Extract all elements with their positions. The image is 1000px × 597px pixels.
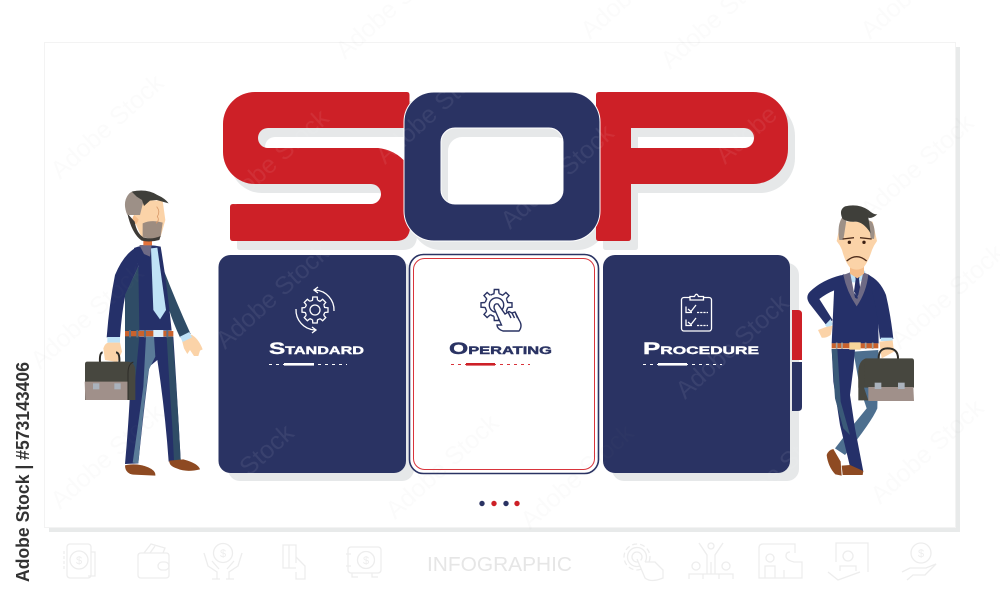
icon: rotating gear	[296, 287, 334, 333]
near arm	[107, 248, 138, 337]
watermarks over coloured shapes: Adobe Stock	[710, 53, 835, 169]
hair	[125, 191, 143, 215]
side tabs	[792, 310, 802, 411]
watermarks on white: Adobe Stock	[865, 393, 990, 509]
icon: mobile money: $	[76, 555, 82, 567]
watermarks over coloured shapes: Adobe Stock	[670, 288, 795, 404]
divider	[451, 363, 530, 366]
bent arm	[807, 275, 842, 326]
torso	[125, 245, 172, 331]
watermarks on white: Adobe Stock	[45, 398, 170, 514]
watermarks on white: Adobe Stock	[855, 108, 980, 224]
character: bearded businessman with briefcase	[85, 191, 203, 476]
watermarks on white: Adobe Stock	[380, 408, 505, 524]
tie	[151, 248, 166, 319]
divider	[269, 363, 347, 366]
cuff	[107, 337, 120, 343]
footer label: INFOGRAPHIC	[427, 554, 572, 576]
icon: gear and hand	[624, 544, 663, 580]
shoes	[125, 464, 155, 476]
briefcase	[100, 352, 119, 363]
icon: coin in hands	[204, 544, 242, 579]
icon: team success	[689, 543, 733, 579]
icon: mobile money	[64, 544, 95, 578]
icon: coin over hand	[902, 543, 936, 580]
heading: Standard: S TANDARD	[269, 340, 364, 358]
panel: main white board	[44, 42, 960, 532]
letter S	[223, 92, 410, 241]
icon: person in hand	[828, 543, 868, 580]
watermarks over coloured shapes: Adobe Stock	[210, 238, 335, 354]
watermarks on white: Adobe Stock	[45, 68, 170, 184]
letter shadows	[230, 101, 795, 250]
pagination dots	[479, 501, 520, 506]
hand	[103, 343, 122, 362]
icon: card in hand	[283, 545, 305, 579]
sweater	[832, 274, 879, 343]
shoes	[827, 449, 842, 476]
heading: Operating: O PERATING	[449, 340, 552, 358]
icon: coin in hands: $	[220, 548, 226, 560]
panel: Standard	[218, 255, 406, 473]
icon: safe: $	[363, 555, 369, 567]
icon: clipboard checklist	[682, 294, 712, 331]
watermarks on white: Adobe Stock	[25, 258, 150, 374]
near arm	[868, 275, 893, 339]
panel: Procedure	[603, 255, 790, 473]
standing leg	[832, 349, 863, 472]
head	[134, 200, 165, 237]
belt	[125, 331, 173, 336]
watermarks over coloured shapes	[175, 53, 840, 534]
icon: safe	[346, 547, 381, 577]
watermarks over coloured shapes: Adobe Stock	[210, 103, 335, 219]
icon: puzzle	[759, 544, 802, 578]
watermarks over coloured shapes: Adobe Stock	[715, 413, 840, 529]
hair	[839, 217, 847, 240]
collar	[139, 245, 152, 257]
briefcase	[879, 348, 898, 359]
letter P	[596, 92, 788, 241]
character: sad businessman leaning with briefcase	[807, 205, 914, 476]
belt	[832, 343, 878, 348]
icon: coin over hand: $	[918, 548, 924, 560]
brows, eyes, mouth	[843, 238, 872, 239]
far hand	[182, 335, 203, 356]
divider	[643, 363, 722, 366]
heading: Procedure: P ROCEDURE	[643, 340, 759, 358]
watermarks on white: Adobe Stock	[515, 418, 640, 534]
hand on handle	[879, 340, 894, 358]
watermarks over coloured shapes: Adobe Stock	[175, 418, 300, 534]
watermarks over coloured shapes: Adobe Stock	[495, 118, 620, 234]
V neck	[843, 272, 868, 306]
shirt and tie	[850, 272, 864, 297]
neck and head	[850, 263, 864, 278]
panel: Operating	[410, 254, 598, 474]
crossed leg	[835, 350, 878, 455]
hands	[818, 326, 833, 338]
icon: wallet	[138, 544, 169, 578]
title: SOP letters	[223, 92, 795, 250]
icon: gear with pointing hand	[481, 290, 521, 331]
vertical credit: Adobe Stock | #573143406	[13, 362, 33, 582]
cuffs	[825, 319, 833, 328]
footer icons row right	[624, 543, 936, 580]
watermarks over coloured shapes: Adobe Stock	[370, 53, 495, 169]
legs	[125, 337, 181, 464]
far arm	[163, 267, 191, 337]
letter O	[404, 92, 600, 241]
card shadows	[228, 263, 799, 481]
footer icons row left	[64, 544, 381, 579]
